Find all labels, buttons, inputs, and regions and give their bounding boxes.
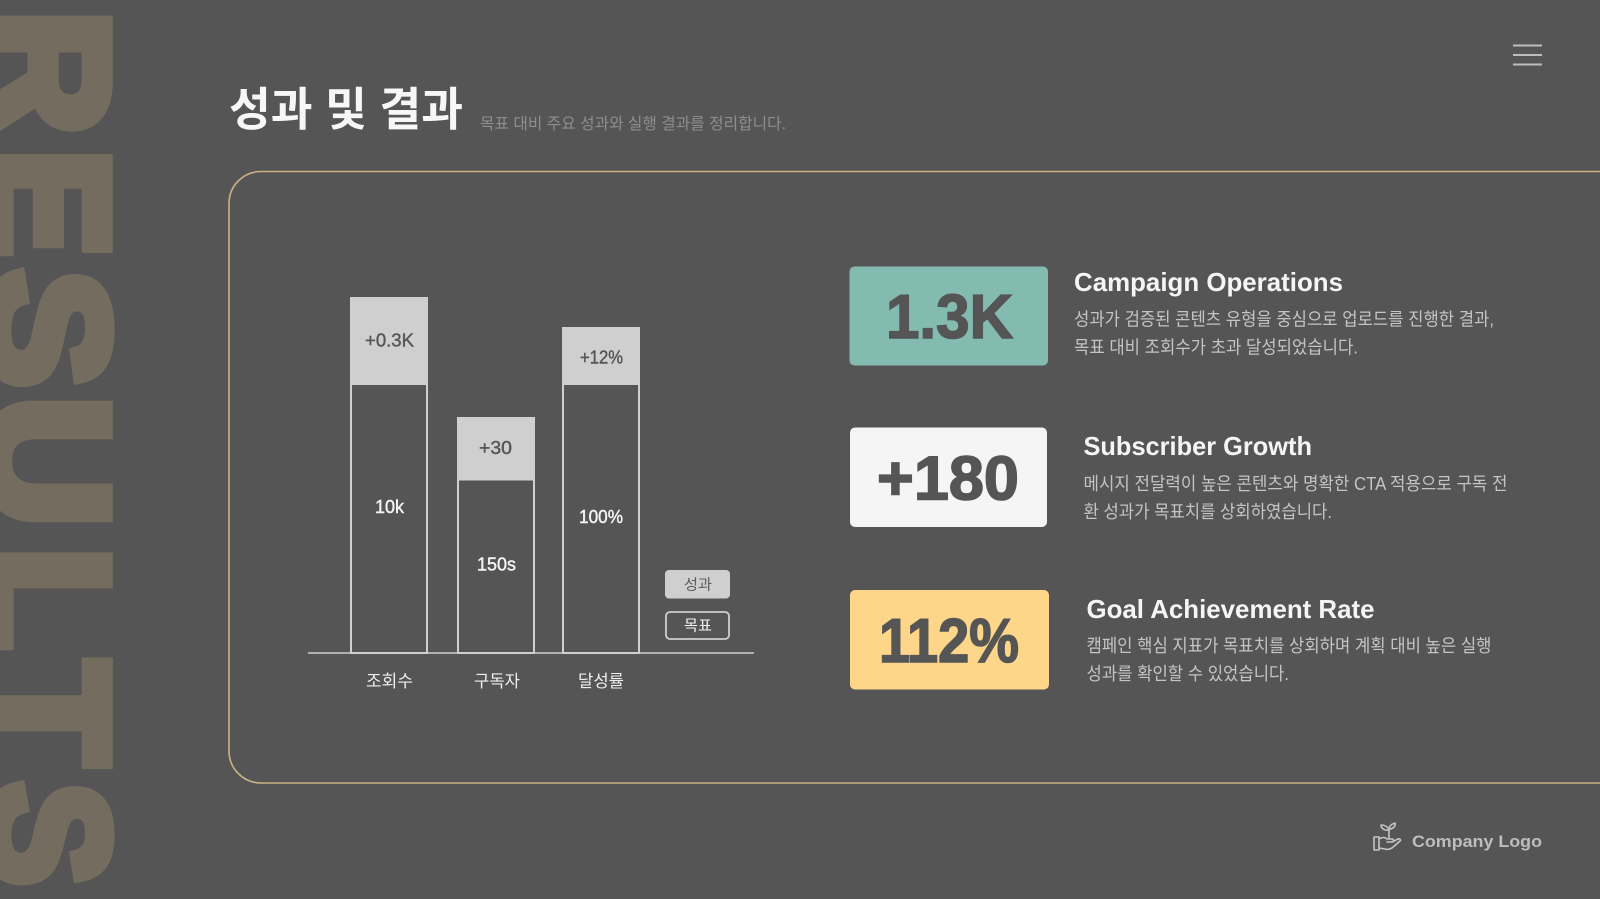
metric: campaign operations [850,266,1494,366]
bar chart [308,297,754,691]
axis labels: 달성률 [578,672,624,691]
subtitle: 목표 대비 주요 성과와 실행 결과를 정리합니다. [480,115,786,133]
metric: campaign operations: Campaign Operations [1074,267,1343,297]
metric: goal achievement rate: 112% [879,607,1019,676]
legend: 성과 [684,576,712,594]
metric: campaign operations: 1.3K [886,283,1013,352]
metric: goal achievement rate: Goal Achievement Rate [1086,594,1374,624]
axis labels: 조회수 [366,672,413,691]
axis labels: 구독자 [474,672,520,691]
legend: 목표 [684,618,712,634]
bar: 조회수 [350,297,428,653]
metric: campaign operations: 목표 대비 조회수가 초과 달성되었습니다. [1074,338,1358,358]
bar: 구독자 [457,417,535,653]
bar: 구독자: 150s [477,554,516,574]
metric: subscriber growth: 환 성과가 목표치를 상회하였습니다. [1084,502,1332,522]
bar: 구독자: +30 [479,438,512,458]
icon: hand with sprout [1374,823,1400,850]
metric: subscriber growth [850,428,1508,527]
legend [665,570,730,639]
bar: 달성률: 100% [579,507,623,527]
bar: 조회수: +0.3K [365,330,414,350]
metric: subscriber growth: 메시지 전달력이 높은 콘텐츠와 명확한 CTA 적용으로 구독 전 [1084,474,1508,494]
bar: 달성률: +12% [580,348,623,368]
metric: goal achievement rate: 성과를 확인할 수 있었습니다. [1086,664,1289,684]
bar: 달성률 [562,327,640,653]
company name: Company Logo [1412,832,1542,851]
metric: subscriber growth: Subscriber Growth [1084,431,1312,461]
watermark: RESULTS vertical text [0,10,144,886]
axis labels [366,672,624,691]
logo [1374,823,1542,851]
metric: subscriber growth: +180 [877,444,1019,514]
title: 성과 및 결과 [229,84,463,136]
icon: menu [1513,46,1542,64]
metric: goal achievement rate: 캠페인 핵심 지표가 목표치를 상회하며 계획 대비 높은 실행 [1086,636,1492,656]
bar: 조회수: 10k [375,497,405,517]
metric: campaign operations: 성과가 검증된 콘텐츠 유형을 중심으로 업로드를 진행한 결과, [1074,310,1494,330]
metric: goal achievement rate [850,590,1492,690]
panel: results frame [229,172,1600,783]
